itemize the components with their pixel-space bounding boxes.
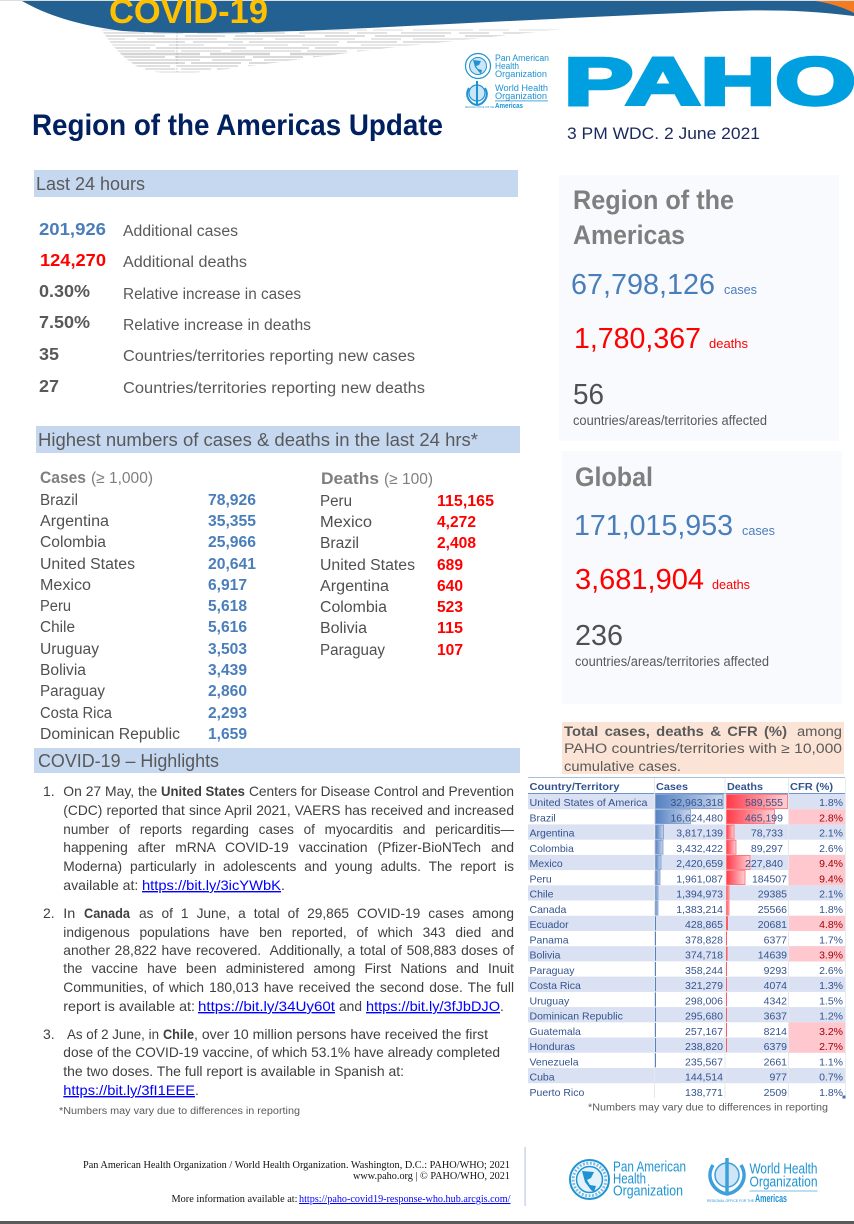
row: Brazil — [530, 812, 843, 824]
row: Argentina: 78,733 — [751, 828, 783, 840]
row: Guatemala: 3.2% — [819, 1026, 843, 1038]
list: cases: 2,860 — [208, 683, 247, 700]
row: Mexico: Mexico — [530, 858, 563, 870]
CFR highlighted cells — [789, 809, 845, 1053]
row: Colombia — [530, 843, 843, 855]
panel heading: Global — [575, 462, 653, 492]
list: deaths: United States — [320, 557, 415, 574]
row: Brazil: Brazil — [530, 812, 556, 824]
row: Colombia: 89,297 — [751, 843, 783, 855]
row: Venezuela: Venezuela — [530, 1056, 579, 1068]
text block: highlight 2: another 28,822 have recovered. Additionally, a total of 508,883 doses of — [63, 942, 514, 958]
row: Peru: 184507 — [752, 873, 787, 885]
list: cases: Chile — [40, 619, 75, 636]
footnote: left: *Numbers may vary due to differences in reporting — [59, 1106, 300, 1117]
list: deaths: 107 — [437, 642, 463, 659]
stat: countries reporting new cases: 35 — [39, 344, 59, 364]
table: cases, deaths and CFR by country — [528, 777, 846, 1099]
row: Ecuador — [530, 919, 843, 931]
row: Paraguay — [530, 965, 843, 977]
footnote: table: *Numbers may vary due to differences in reporting — [588, 1102, 828, 1114]
row: Honduras: 2.7% — [819, 1041, 843, 1053]
row: Dominican Republic — [530, 1011, 843, 1023]
stat: countries: countries/areas/territories affected — [575, 654, 769, 669]
stat: cases: cases — [742, 523, 775, 538]
row: Cuba: 144,514 — [685, 1072, 723, 1084]
text block: highlight 3: dose of the COVID-19 vaccine, of which 53.1% have already completed — [63, 1044, 500, 1060]
logos: PAHO and WHO small: REGIONAL OFFICE FOR THE — [465, 105, 494, 109]
stat: deaths: 3,681,904 — [575, 564, 704, 596]
stat: relative increase in cases: 0.30% — [39, 281, 90, 301]
text block: highlight 2: Communities, of which 180,013 have received the second dose. The full — [63, 979, 514, 995]
list: cases: 25,966 — [208, 534, 256, 551]
list: cases: Costa Rica — [40, 705, 112, 722]
row: Argentina: 3,817,139 — [676, 828, 723, 840]
row: Canada: 1.8% — [819, 904, 843, 916]
row: Honduras — [530, 1041, 843, 1053]
stat: additional deaths — [40, 250, 247, 271]
data bars: small cases ticks — [655, 916, 656, 1067]
text block: highlight 3: 3. — [43, 1026, 55, 1042]
stat: countries: 56 — [573, 379, 604, 411]
list: cases: 1,659 — [208, 726, 247, 743]
row: Bolivia: 374,718 — [685, 950, 723, 962]
row: Venezuela — [530, 1056, 843, 1068]
row: Mexico: 9.4% — [819, 858, 843, 870]
stat: deaths: 1,780,367 — [574, 323, 701, 355]
row: Panama: Panama — [530, 934, 569, 946]
row: Dominican Republic: 295,680 — [685, 1011, 723, 1023]
column separators — [654, 778, 846, 1098]
list: cases: Cases — [40, 468, 86, 487]
row: Chile: Chile — [530, 889, 554, 901]
list: cases: Colombia — [40, 534, 106, 551]
row: Brazil: 465,199 — [745, 812, 783, 824]
footer citation: https://paho-covid19-response-who.hub.arcgis.com/ — [299, 1194, 511, 1205]
stat: relative increase in cases — [39, 281, 301, 303]
row: Bolivia: Bolivia — [530, 950, 561, 962]
stat: relative increase in deaths: Relative increase in deaths — [123, 317, 311, 334]
stat: countries reporting new deaths: 27 — [39, 376, 59, 396]
row: Cuba: 0.7% — [819, 1072, 843, 1084]
logos: PAHO and WHO small: Americas — [495, 103, 523, 110]
text block: highlight 1: happening after mRNA COVID-19 vaccination (Pfizer-BioNTech and — [63, 839, 514, 855]
row: Brazil: 2.8% — [819, 812, 843, 824]
stat: additional cases: 201,926 — [39, 219, 106, 239]
text block: highlight 1 — [43, 783, 514, 893]
list: deaths: Peru — [320, 493, 352, 510]
table title: PAHO countries/territories with ≥ 10,000 — [564, 741, 842, 756]
table title: cumulative cases. — [564, 759, 681, 774]
row: Costa Rica: 321,279 — [685, 980, 723, 992]
panel: global — [562, 451, 842, 704]
stat: relative increase in deaths — [39, 312, 311, 334]
section heading: last 24 hours — [34, 170, 518, 197]
text block: highlight 2: indigenous populations have ben reported, of which 343 died and — [63, 924, 514, 940]
list: cases: Uruguay — [40, 641, 99, 658]
stat: countries reporting new cases — [39, 344, 415, 365]
row: Costa Rica — [530, 980, 843, 992]
section heading: highlights: COVID-19 – Highlights — [38, 751, 219, 771]
section heading: highest numbers: Highest numbers of cases & deaths in the last 24 hrs* — [38, 430, 478, 450]
footer logo: WHO — [707, 1158, 818, 1205]
row: Chile: 29385 — [758, 889, 787, 901]
row: Puerto Rico — [530, 1087, 843, 1099]
footer logo: WHO: World Health — [750, 1162, 818, 1178]
panel heading: Region of the — [573, 185, 734, 215]
list: cases: 5,616 — [208, 619, 247, 636]
text block: highlight 2: Canada — [84, 905, 130, 921]
row: Colombia: Colombia — [530, 843, 574, 855]
row: Mexico — [530, 858, 843, 870]
data bars: small deaths ticks — [726, 916, 728, 1052]
list: cases — [40, 468, 256, 743]
text block: highlight 1: On 27 May, the — [63, 783, 158, 799]
row: Ecuador: 20681 — [758, 919, 787, 931]
row: United States of America: 32,963,318 — [670, 797, 723, 809]
row: Panama: 6377 — [764, 934, 787, 946]
list: deaths: Brazil — [320, 535, 359, 552]
list: deaths: 523 — [437, 599, 463, 616]
list: deaths: Bolivia — [320, 620, 367, 637]
row: Mexico: 227,840 — [745, 858, 783, 870]
row: Dominican Republic: 1.2% — [819, 1011, 843, 1023]
row: Colombia: 2.6% — [819, 843, 843, 855]
data bars: cases — [656, 794, 723, 915]
stat: deaths: deaths — [709, 336, 748, 351]
stat: cases: 171,015,953 — [574, 510, 733, 542]
row: Panama: 378,828 — [685, 934, 723, 946]
text block: highlight 1: Moderna) particularly in adolescents and young adults. The report is — [63, 858, 514, 874]
list: cases: Peru — [40, 598, 71, 615]
text block: highlight 1: (CDC) reported that since April 2021, VAERS has received and increased — [63, 802, 514, 818]
text block: highlight 2: report is available at: — [63, 998, 195, 1014]
text block: highlight 2: 2. — [43, 905, 55, 921]
text block: highlight 2: https://bit.ly/34Uy60t — [198, 998, 335, 1014]
list: cases: Bolivia — [40, 662, 86, 679]
row: Peru: 1,961,087 — [676, 873, 723, 885]
text block: highlight 2: the vaccine have been administered among First Nations and Inuit — [63, 960, 514, 976]
table header: Cases — [656, 781, 688, 793]
table header: Country/Territory — [530, 781, 620, 793]
row: Uruguay: 1.5% — [819, 995, 843, 1007]
row: United States of America: 589,555 — [745, 797, 783, 809]
footer citation: More information available at: — [172, 1194, 298, 1205]
text block: highlight 3: Chile — [163, 1026, 194, 1042]
list: cases: Brazil — [40, 492, 78, 509]
footer logo: PAHO: Pan American — [613, 1160, 686, 1176]
list: cases: 5,618 — [208, 598, 247, 615]
row: Guatemala: Guatemala — [530, 1026, 581, 1038]
table title: among — [797, 724, 842, 739]
row: Mexico: 2,420,659 — [676, 858, 723, 870]
text block: highlight 2: as of 1 June, a total of 29,865 COVID-19 cases among — [139, 905, 514, 921]
panel: last 24 hours — [34, 170, 518, 397]
row: Costa Rica: 1.3% — [819, 980, 843, 992]
text block: highlight 1: Centers for Disease Control and Prevention — [249, 783, 514, 799]
row: Paraguay: Paraguay — [530, 965, 575, 977]
row: Canada: Canada — [530, 904, 566, 916]
text block: highlight 3: . — [195, 1082, 199, 1098]
stat: countries — [575, 620, 769, 669]
logos: PAHO and WHO small: Organization — [495, 91, 547, 101]
footer logo: WHO: Organization — [750, 1174, 818, 1190]
row: Brazil: 16,624,480 — [670, 812, 723, 824]
logo wordmark: PAHO: PAHO — [564, 44, 854, 120]
logos: PAHO and WHO small: Pan American — [495, 53, 549, 63]
row: Cuba: 977 — [769, 1072, 787, 1084]
text block: highlight 1: . — [281, 877, 285, 893]
stat: cases: cases — [724, 282, 757, 297]
panel heading: Americas — [573, 220, 685, 250]
stat: countries reporting new deaths — [39, 376, 425, 397]
row: Argentina: 2.1% — [819, 828, 843, 840]
logos: PAHO and WHO small — [465, 53, 549, 110]
row: Costa Rica: Costa Rica — [530, 980, 581, 992]
row: Peru: Peru — [530, 873, 552, 885]
logos: PAHO and WHO small: World Health — [495, 83, 548, 93]
list: deaths — [320, 469, 494, 659]
row: Honduras: 6379 — [764, 1041, 787, 1053]
row: Venezuela: 1.1% — [819, 1056, 843, 1068]
footer logo: WHO: Americas — [755, 1193, 787, 1205]
row: Uruguay — [530, 995, 843, 1007]
row: Uruguay: 4342 — [764, 995, 787, 1007]
footer logo: WHO: REGIONAL OFFICE FOR THE — [707, 1198, 754, 1203]
text block: highlight 1: number of reports regarding cases of myocarditis and pericarditis— — [63, 821, 514, 837]
stat: relative increase in cases: Relative increase in cases — [123, 286, 301, 303]
date line: 3 PM WDC. 2 June 2021 — [567, 124, 760, 143]
row: Costa Rica: 4074 — [764, 980, 787, 992]
footer divider — [524, 1147, 526, 1206]
stat: countries — [573, 379, 767, 428]
panel heading — [573, 185, 734, 250]
text block: highlight 3: , over 10 million persons have received the first — [194, 1026, 488, 1042]
list: deaths: Deaths — [321, 469, 379, 488]
row: Colombia: 3,432,422 — [676, 843, 723, 855]
list: cases: Dominican Republic — [40, 726, 180, 743]
row: Ecuador: Ecuador — [530, 919, 569, 931]
footer logo: PAHO: Organization — [613, 1184, 683, 1200]
list: cases: Mexico — [40, 577, 91, 594]
row: Peru — [530, 873, 843, 885]
logos: PAHO and WHO small: Health — [495, 61, 519, 71]
logos: PAHO and WHO small: Organization — [495, 69, 547, 79]
row: Paraguay: 9293 — [764, 965, 787, 977]
row: United States of America: United States of America — [530, 797, 648, 809]
text block: highlight 1: 1. — [43, 783, 55, 799]
row: Dominican Republic: Dominican Republic — [530, 1011, 623, 1023]
row: Panama: 1.7% — [819, 934, 843, 946]
list: cases: 3,439 — [208, 662, 247, 679]
list: cases: 6,917 — [208, 577, 247, 594]
table title: Total cases, deaths & CFR (%) — [564, 724, 787, 739]
section heading: last 24 hours: Last 24 hours — [36, 174, 145, 194]
list: cases: 78,926 — [208, 492, 256, 509]
header banner — [0, 0, 854, 72]
row: Honduras: Honduras — [530, 1041, 575, 1053]
stat: deaths: deaths — [712, 577, 750, 592]
stat: cases: 67,798,126 — [571, 269, 715, 301]
row: Ecuador: 4.8% — [819, 919, 843, 931]
list: cases: (≥ 1,000) — [91, 470, 153, 487]
row: Canada: 25566 — [758, 904, 787, 916]
table title — [562, 722, 844, 774]
list: deaths: Mexico — [320, 514, 372, 531]
table header: Deaths — [727, 781, 763, 793]
text block: highlight 3: https://bit.ly/3fI1EEE — [63, 1082, 195, 1098]
row: Peru: 9.4% — [819, 873, 843, 885]
row: Guatemala — [530, 1026, 843, 1038]
row: Uruguay: Uruguay — [530, 995, 570, 1007]
stat: additional cases — [39, 219, 238, 240]
stat: countries reporting new cases: Countries/territories reporting new cases — [123, 348, 415, 365]
list: cases: 3,503 — [208, 641, 247, 658]
footer citation: Pan American Health Organization / World Health Organization. Washington, D.C.: PAHO/WHO; 2021 — [83, 1160, 510, 1171]
stat: additional deaths: 124,270 — [40, 250, 106, 270]
section heading: highest numbers — [36, 426, 520, 453]
list: deaths: 689 — [437, 557, 463, 574]
row: Paraguay: 2.6% — [819, 965, 843, 977]
text block: highlight 2 — [43, 905, 514, 1014]
row: Puerto Rico: 2509 — [764, 1087, 787, 1099]
footer logo: PAHO — [570, 1160, 686, 1200]
footer citation — [83, 1160, 511, 1205]
panel: region of the americas — [559, 175, 839, 441]
table header — [528, 777, 845, 794]
data bars: deaths — [726, 794, 788, 915]
row: Venezuela: 2661 — [764, 1056, 787, 1068]
text block: highlight 2: and — [339, 998, 362, 1014]
text block: highlight 2: In — [63, 905, 75, 921]
text block: highlight 2: . — [500, 998, 504, 1014]
row: Bolivia: 14639 — [758, 950, 787, 962]
section heading: highlights — [34, 748, 520, 773]
text block: highlight 3: the two doses. The full report is available in Spanish at: — [63, 1063, 404, 1079]
row: Puerto Rico: 1.8% — [819, 1087, 843, 1099]
row: Guatemala: 8214 — [764, 1026, 787, 1038]
text block: highlight 3 — [43, 1026, 500, 1098]
stat: additional deaths: Additional deaths — [123, 254, 247, 271]
row: Chile: 2.1% — [819, 889, 843, 901]
stat: relative increase in deaths: 7.50% — [39, 312, 90, 332]
row: Argentina — [530, 828, 843, 840]
footer logo: PAHO: Health — [613, 1172, 646, 1188]
list: cases: 2,293 — [208, 705, 247, 722]
row: Cuba: Cuba — [530, 1072, 555, 1084]
row stripes — [528, 794, 845, 1083]
list: cases: 35,355 — [208, 513, 256, 530]
stat: countries: 236 — [575, 620, 623, 652]
text block: highlight 2: https://bit.ly/3fJbDJO — [366, 998, 500, 1014]
list: cases: 20,641 — [208, 556, 256, 573]
row: United States of America: 1.8% — [819, 797, 843, 809]
footer band — [0, 1221, 854, 1224]
row: Dominican Republic: 3637 — [764, 1011, 787, 1023]
list: deaths: Argentina — [320, 578, 389, 595]
table header: CFR (%) — [790, 781, 833, 793]
stat: countries reporting new deaths: Countries/territories reporting new deaths — [123, 380, 425, 397]
text block: highlight 1: United States — [161, 783, 245, 799]
list: deaths: 2,408 — [437, 535, 476, 552]
list: cases: Argentina — [40, 513, 109, 530]
table resize handle — [842, 1096, 846, 1098]
row: Chile — [530, 889, 843, 901]
row: Canada — [530, 904, 843, 916]
row: Canada: 1,383,214 — [676, 904, 723, 916]
row: Puerto Rico: Puerto Rico — [530, 1087, 585, 1099]
row: Puerto Rico: 138,771 — [685, 1087, 723, 1099]
footer citation: www.paho.org | © PAHO/WHO, 2021 — [353, 1171, 510, 1182]
text block: highlight 1: available at: — [63, 877, 138, 893]
row: Bolivia — [530, 950, 843, 962]
list: deaths: 640 — [437, 578, 463, 595]
row: Bolivia: 3.9% — [819, 950, 843, 962]
row: Uruguay: 298,006 — [685, 995, 723, 1007]
list: cases: United States — [40, 556, 135, 573]
row: Honduras: 238,820 — [685, 1041, 723, 1053]
row: Paraguay: 358,244 — [685, 965, 723, 977]
list: deaths: Colombia — [320, 599, 387, 616]
main title: Region of the Americas Update — [32, 109, 443, 142]
text block: highlight 1: https://bit.ly/3icYWbK — [142, 877, 282, 893]
list: deaths: 4,272 — [437, 514, 476, 531]
list: cases: Paraguay — [40, 683, 105, 700]
list: deaths: Paraguay — [320, 642, 385, 659]
row: Ecuador: 428,865 — [685, 919, 723, 931]
stat: additional cases: Additional cases — [123, 223, 238, 240]
row: Panama — [530, 934, 843, 946]
list: deaths: 115,165 — [437, 493, 494, 510]
row: Venezuela: 235,567 — [685, 1056, 723, 1068]
list: deaths: (≥ 100) — [384, 471, 433, 488]
row: Guatemala: 257,167 — [685, 1026, 723, 1038]
row: Cuba — [530, 1072, 843, 1084]
row: Argentina: Argentina — [530, 828, 575, 840]
list: deaths: 115 — [437, 620, 463, 637]
stat: countries: countries/areas/territories affected — [573, 413, 767, 428]
row: Chile: 1,394,973 — [676, 889, 723, 901]
row: United States of America — [530, 797, 843, 809]
text block: highlight 3: As of 2 June, in — [67, 1026, 159, 1042]
